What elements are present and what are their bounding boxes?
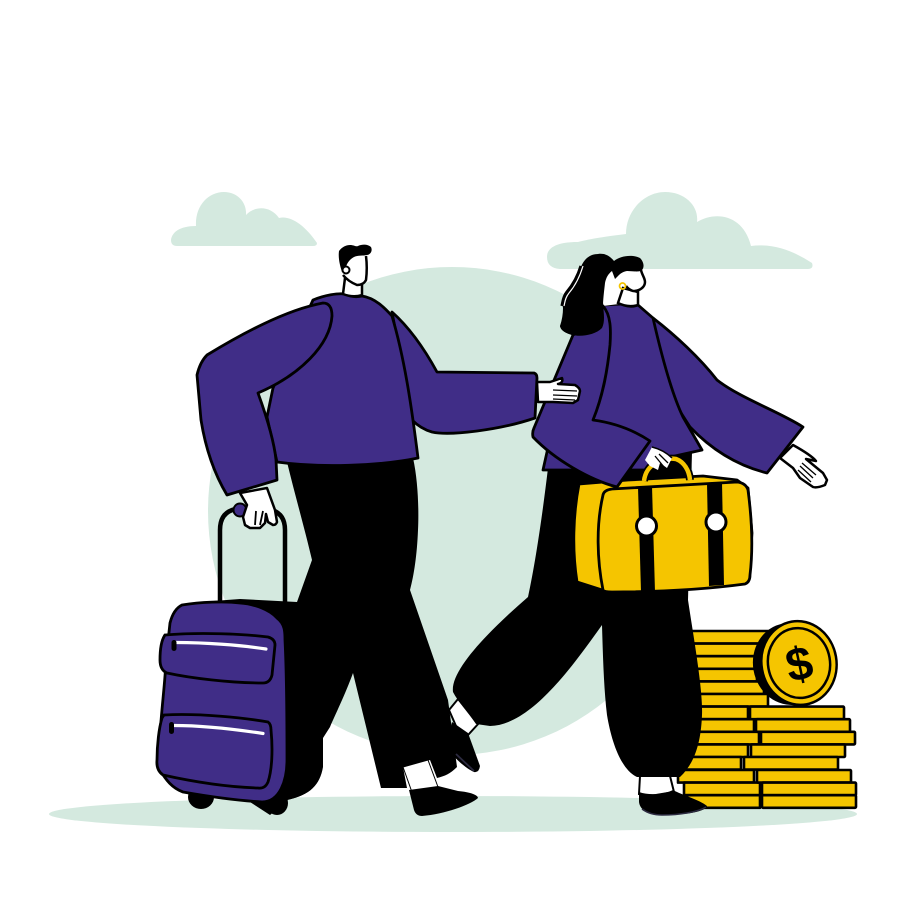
- bag: back panel: [574, 476, 752, 590]
- woman: hair highlight: [562, 266, 583, 306]
- woman: hand on bag: [645, 447, 672, 470]
- man: front shoe: [409, 786, 478, 816]
- suitcase handle: [220, 509, 285, 602]
- woman: face outline: [626, 270, 645, 291]
- bag: handle: [644, 459, 690, 481]
- dollar sign: $: [781, 635, 817, 692]
- woman: back shoe sole: [456, 754, 474, 771]
- woman: hair over sleeve: [560, 306, 604, 336]
- woman: back shoe: [447, 722, 480, 772]
- man: hand on handle: [240, 488, 277, 528]
- bag: front panel: [598, 482, 752, 592]
- man: ear: [342, 266, 350, 274]
- man: front sock: [403, 760, 438, 795]
- suitcase: [157, 599, 323, 815]
- suitcase: lower zipper: [174, 726, 263, 734]
- man: torso: [267, 294, 418, 465]
- background circle: [208, 267, 696, 755]
- bag: strap right: [707, 482, 724, 586]
- suitcase: lower pocket: [157, 715, 272, 788]
- man: far arm: [392, 312, 537, 433]
- suitcase: lower zip pull: [169, 722, 174, 734]
- suitcase: front shell: [159, 602, 287, 802]
- bag: strap left: [638, 486, 655, 592]
- woman: front shoe: [639, 790, 707, 815]
- man: trousers: [240, 458, 457, 800]
- woman: torso: [543, 304, 702, 470]
- woman: front shoe sole: [642, 807, 706, 815]
- cloud: right: [547, 192, 812, 269]
- suitcase: wheels: [188, 785, 288, 815]
- bag: rivet right: [706, 512, 726, 532]
- man: [157, 245, 580, 816]
- man: face: [344, 254, 367, 285]
- woman: far hand: [780, 445, 827, 487]
- woman: neck: [618, 288, 638, 306]
- woman: skin behind hair: [603, 268, 624, 306]
- man: hand fingers: [553, 390, 577, 400]
- woman: back sock: [449, 699, 479, 735]
- suitcase: side panel: [200, 599, 323, 802]
- cloud: left: [171, 192, 317, 246]
- man: neck: [343, 278, 362, 296]
- suitcase: upper zipper: [176, 642, 266, 649]
- man: far hand: [537, 378, 580, 403]
- suitcase: upper pocket: [160, 634, 275, 683]
- woman: [447, 254, 827, 815]
- big dollar coin: [746, 615, 843, 711]
- man: hair: [339, 245, 372, 272]
- suitcase: upper zip pull: [172, 640, 176, 651]
- woman: far arm: [653, 318, 803, 473]
- coins: lower left stack: [678, 707, 760, 808]
- woman: face: [616, 268, 645, 291]
- yellow bag: [574, 459, 752, 592]
- bag: rivet left: [636, 516, 656, 536]
- coins: upper stack: [680, 631, 770, 707]
- man: face outline: [343, 256, 367, 285]
- suitcase handle knob: [234, 504, 246, 516]
- man: near arm: [197, 303, 332, 495]
- ground shadow: [49, 796, 857, 832]
- coin stacks: [678, 631, 856, 808]
- woman: front sock: [639, 776, 674, 796]
- woman: near arm sleeve: [533, 306, 650, 487]
- woman: hair: [560, 254, 644, 336]
- woman: ear and earring: [617, 276, 626, 289]
- woman: trousers: [453, 452, 702, 777]
- coins: lower right stack: [744, 707, 856, 808]
